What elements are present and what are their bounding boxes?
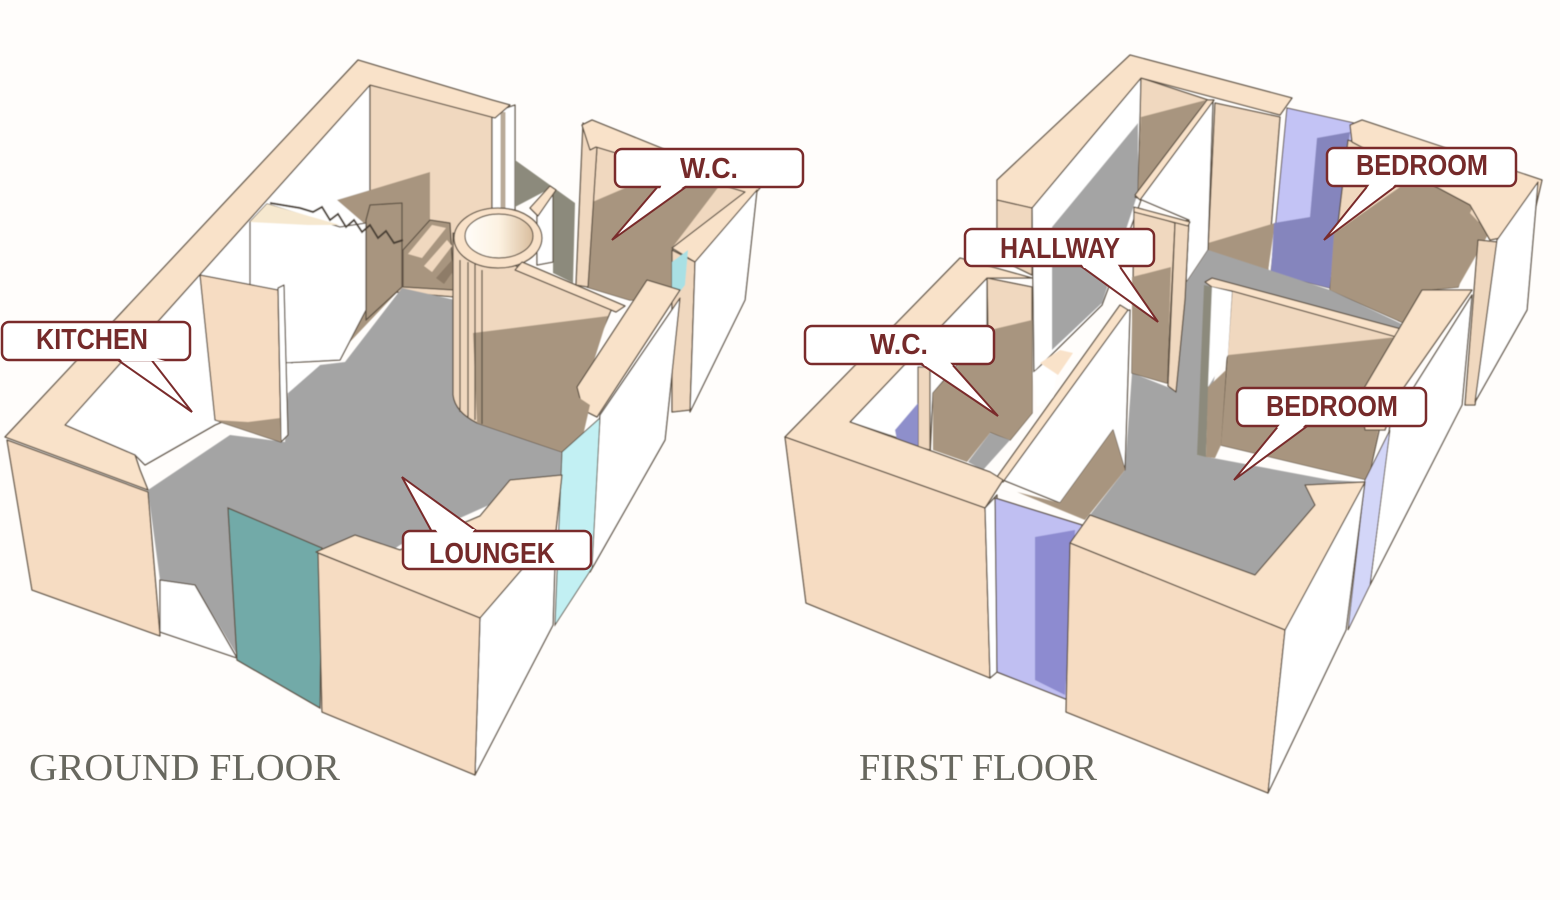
right bedroom cap — [1360, 290, 1472, 430]
step one — [408, 225, 446, 258]
wc tan strip — [918, 367, 930, 450]
ring and top — [454, 208, 542, 268]
callout: hallway — [965, 229, 1158, 322]
wc floor — [968, 433, 1010, 470]
right white wall — [590, 298, 680, 572]
block ledge — [250, 204, 365, 225]
heading: first floor: FIRST FLOOR — [859, 747, 1098, 789]
teal door — [228, 508, 322, 708]
rear tan strip — [672, 250, 695, 412]
diagonal partition white — [1003, 310, 1130, 503]
panel thin cap — [1135, 100, 1214, 200]
blue panel shadow — [1271, 132, 1350, 288]
blue sliver — [895, 403, 918, 447]
front right cap — [1070, 482, 1365, 630]
right rear cap — [1350, 120, 1542, 240]
callout: bedroom front: BEDROOM — [1266, 391, 1398, 423]
callout: bedroom rear — [1324, 148, 1516, 240]
door shadow — [1035, 530, 1075, 695]
wc back wall shadow — [990, 320, 1032, 440]
ground floor model — [5, 60, 760, 775]
rear cap tan face — [997, 200, 1032, 275]
ring outer — [454, 208, 542, 268]
callout: lounge: LOUNGEK — [429, 538, 555, 570]
wc wall shadow — [587, 185, 720, 300]
mid shadow — [1132, 267, 1171, 383]
rear alcove tan — [1138, 78, 1208, 195]
bedroom frame cap — [1205, 278, 1405, 338]
column lines — [460, 260, 482, 424]
blue panel rear — [1271, 108, 1354, 288]
wall top cap: rear left — [5, 60, 510, 490]
rear upper cap — [997, 55, 1292, 208]
diagonal thin cap — [997, 305, 1128, 482]
white panel — [1135, 100, 1213, 283]
upper hallway cap — [1134, 207, 1190, 226]
rear alcove shadow — [1138, 100, 1206, 193]
callout: bedroom rear: BEDROOM — [1356, 150, 1488, 182]
stair block dark box — [366, 203, 402, 320]
partition wall by kitchen — [200, 275, 281, 442]
far right tan strip — [1465, 240, 1497, 405]
bedroom rear shadow — [1330, 187, 1489, 323]
ring arm — [530, 186, 556, 216]
lower bedroom shadow — [1221, 337, 1397, 480]
rear grey shadow — [1052, 123, 1138, 350]
right outer white face — [475, 530, 556, 775]
rear right white wall — [690, 190, 757, 412]
white return — [160, 580, 237, 658]
partition white edge — [278, 285, 288, 442]
callout: wc first — [805, 326, 998, 416]
wc lower tan — [933, 330, 990, 462]
callout: hallway: HALLWAY — [1000, 233, 1120, 265]
white pilaster strip — [492, 105, 515, 215]
ring inner — [465, 214, 533, 258]
white panel by ring — [537, 190, 553, 265]
white jamb — [985, 495, 997, 678]
curved wall shadow — [473, 316, 608, 453]
wc back wall — [987, 278, 1032, 440]
callout: lounge — [402, 477, 591, 570]
front right wall — [318, 553, 480, 775]
cyan glazing — [555, 418, 600, 625]
back wall face — [370, 85, 492, 300]
step two — [424, 240, 452, 272]
mid partition tan — [1132, 210, 1175, 383]
right wall cap — [577, 280, 680, 417]
pilaster line — [500, 112, 506, 212]
step three — [436, 260, 454, 284]
back wall shadow — [337, 172, 430, 345]
curved column and wall — [453, 233, 612, 453]
bedroom rear wall — [1330, 140, 1490, 323]
back tan wall — [1208, 103, 1280, 278]
heading: ground floor: GROUND FLOOR — [29, 747, 341, 789]
wc back wall — [587, 147, 750, 300]
teal window rear — [672, 250, 688, 302]
partition shadow — [215, 418, 281, 442]
stair rail teeth — [270, 203, 403, 243]
first floor model — [785, 55, 1542, 793]
white patch beside partition — [283, 363, 320, 393]
frame white strip — [1208, 287, 1232, 387]
lower bedroom wall — [1221, 290, 1400, 480]
white block beside stairs — [250, 204, 366, 363]
callout: wc first: W.C. — [870, 329, 928, 361]
front left wall — [7, 440, 160, 636]
wc white wall — [850, 278, 987, 455]
partition tan foot — [1017, 430, 1125, 520]
frame dark edge — [1197, 285, 1212, 457]
left white wall rear — [1032, 78, 1141, 372]
thin cap on wall — [515, 262, 625, 312]
left wall cap — [785, 258, 1032, 508]
lilac door — [995, 498, 1082, 700]
wc left strip — [576, 123, 597, 287]
front right wall — [1066, 543, 1285, 793]
far right white wall — [1475, 182, 1538, 402]
frame tan foot — [1206, 370, 1226, 458]
callout: kitchen: KITCHEN — [36, 324, 148, 356]
white stair gap — [1033, 350, 1060, 407]
front left wall — [785, 437, 990, 678]
outer white face — [1268, 482, 1365, 793]
floor first — [1090, 250, 1404, 575]
dark corner strip — [566, 395, 590, 452]
floor: ground — [148, 288, 563, 655]
stair body — [403, 220, 454, 290]
lilac glazing right — [1348, 430, 1390, 630]
mid striped edge — [1168, 220, 1189, 392]
wc passage shadow — [515, 160, 575, 283]
kitchen white wall — [65, 85, 370, 465]
back wall shadow — [1208, 223, 1275, 278]
stair steps upper — [1040, 350, 1073, 375]
callout: kitchen — [2, 322, 192, 412]
callout: wc ground — [612, 149, 803, 240]
right white wall — [1370, 295, 1472, 585]
callout: wc ground: W.C. — [680, 153, 738, 185]
stairs — [403, 220, 454, 290]
wc cap — [582, 120, 760, 262]
callout: bedroom front — [1234, 388, 1426, 480]
front right cap — [316, 475, 562, 618]
